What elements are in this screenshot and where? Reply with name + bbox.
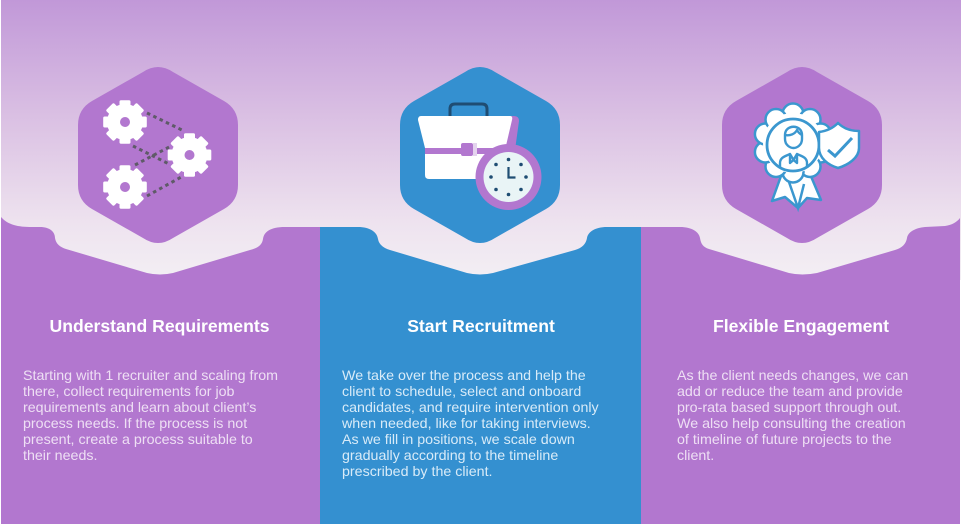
briefcase strap [425,148,510,154]
body text: there, collect requirements for job [23,384,235,400]
body text: As the client needs changes, we can [677,368,908,384]
panel: understand requirements [1,217,320,524]
icon: connected gears [78,67,238,243]
panel shape [1,217,320,524]
body text: We also help consulting the creation [677,416,906,432]
heading: Start Recruitment [407,316,555,336]
briefcase buckle [461,143,473,156]
body text: process needs. If the process is not [23,416,247,432]
body text: present, create a process suitable to [23,432,253,448]
ribbon [772,174,821,208]
body text: pro-rata based support through out. [677,400,901,416]
body text: of timeline of future projects to the [677,432,892,448]
background gradient [1,0,961,280]
dotted connectors [133,113,184,196]
panel: start recruitment [320,227,641,524]
briefcase flap edge [500,116,519,160]
body text: We take over the process and help the [342,368,586,384]
body text: Starting with 1 recruiter and scaling from [23,368,278,384]
briefcase body [418,116,512,179]
hexagon: briefcase [400,67,560,243]
body text: prescribed by the client. [342,464,492,480]
clock [476,144,542,210]
icon: award badge and shield [722,67,882,243]
hexagon: gears [78,67,238,243]
body text: gradually according to the timeline [342,448,558,464]
gear bottom [103,165,147,209]
body text: their needs. [23,448,97,464]
icon: briefcase and clock [400,67,560,243]
panel: flexible engagement [641,218,960,524]
hexagon: badge [722,67,882,243]
body text: client to schedule, select and onboard [342,384,581,400]
body text: As we fill in positions, we scale down [342,432,575,448]
gear top [103,100,147,144]
panel shape [641,218,960,524]
rosette [755,104,831,182]
body text: requirements and learn about client’s [23,400,256,416]
heading: Understand Requirements [50,316,270,336]
body text: when needed, like for taking interviews. [341,416,591,432]
body text: candidates, and require intervention only [342,400,600,416]
panel shape [320,227,641,524]
body text: add or reduce the team and provide [677,384,903,400]
body text: client. [677,448,714,464]
gear right [168,133,211,177]
person [780,127,807,168]
briefcase handle [450,104,487,118]
heading: Flexible Engagement [713,316,889,336]
shield [819,123,859,168]
